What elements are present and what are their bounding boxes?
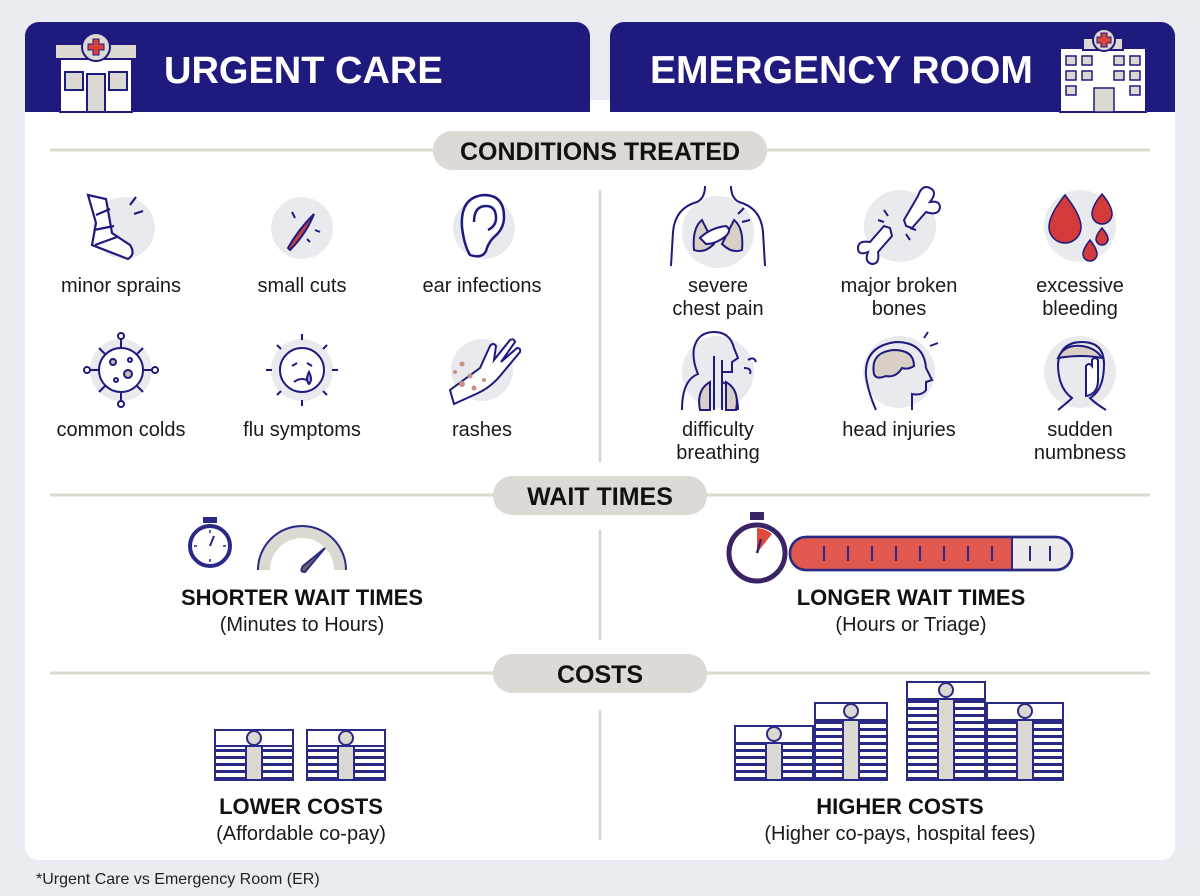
icon: stopwatch <box>729 512 785 581</box>
header: urgent care <box>25 22 590 112</box>
title: urgent care: URGENT CARE <box>164 50 443 92</box>
header: emergency room <box>610 22 1175 112</box>
panel: emergency room conditions: major broken <box>841 275 957 297</box>
panel: emergency room conditions: severe <box>688 275 748 297</box>
icon: chest pain <box>671 186 765 268</box>
panel: urgent care conditions: small cuts <box>258 275 346 297</box>
dividers <box>50 150 1150 840</box>
panel: er costs: (Higher co-pays, hospital fees) <box>764 823 1036 845</box>
section heading: wait times <box>493 476 707 515</box>
section heading: costs <box>493 654 707 693</box>
icon: small stopwatch <box>190 517 230 566</box>
icon: money stacks small <box>215 730 385 780</box>
icon: small cut <box>271 197 333 259</box>
panel: urgent care conditions: rashes <box>452 419 512 441</box>
panel: er wait: LONGER WAIT TIMES <box>797 585 1025 610</box>
panel: er costs: HIGHER COSTS <box>816 794 984 819</box>
panel: emergency room conditions: breathing <box>676 442 760 464</box>
icon: clinic building <box>55 33 137 112</box>
icon: head injury <box>863 332 938 410</box>
icon: money stacks large <box>735 682 1063 780</box>
panel: urgent care wait: (Minutes to Hours) <box>220 614 384 636</box>
icon: ear <box>453 195 515 259</box>
panel: urgent care conditions: flu symptoms <box>243 419 361 441</box>
icon: flu face <box>266 334 338 406</box>
footnote: *Urgent Care vs Emergency Room (ER) <box>36 871 320 888</box>
panel: emergency room conditions: sudden <box>1047 419 1113 441</box>
section heading: wait times: WAIT TIMES <box>527 483 673 511</box>
panel: er wait: (Hours or Triage) <box>835 614 987 636</box>
section heading: costs: COSTS <box>557 661 643 689</box>
panel: urgent care costs: (Affordable co-pay) <box>216 823 386 845</box>
panel: urgent care conditions: ear infections <box>423 275 541 297</box>
panel: urgent care conditions: common colds <box>57 419 185 441</box>
panel: urgent care wait: SHORTER WAIT TIMES <box>181 585 423 610</box>
panel: er wait <box>729 512 1072 636</box>
icon: breathing <box>682 332 756 410</box>
icon: gauge <box>258 526 346 572</box>
icon: numbness <box>1044 336 1116 410</box>
section heading: conditions treated <box>433 131 767 170</box>
progress bar <box>790 537 1072 570</box>
panel: urgent care conditions <box>57 195 541 441</box>
panel: urgent care costs: LOWER COSTS <box>219 794 383 819</box>
panel: emergency room conditions: head injuries <box>842 419 956 441</box>
icon: hospital <box>1060 29 1146 112</box>
title: emergency room: EMERGENCY ROOM <box>650 49 1033 92</box>
panel: emergency room conditions: difficulty <box>682 419 754 441</box>
panel: emergency room conditions: excessive <box>1036 275 1124 297</box>
panel: urgent care conditions: minor sprains <box>61 275 181 297</box>
icon: blood drops <box>1044 190 1116 262</box>
section heading: conditions treated: CONDITIONS TREATED <box>460 138 740 166</box>
icon: rash hand <box>450 339 520 404</box>
icon: sprain <box>88 195 155 259</box>
icon: virus <box>84 333 158 407</box>
panel: urgent care wait <box>181 517 423 636</box>
panel: emergency room conditions: numbness <box>1034 442 1126 464</box>
icon: broken bone <box>858 187 940 264</box>
panel: urgent care costs <box>215 730 386 845</box>
panel: er costs <box>735 682 1063 845</box>
panel: emergency room conditions: bones <box>872 298 926 320</box>
panel: emergency room conditions: bleeding <box>1042 298 1118 320</box>
panel: emergency room conditions: chest pain <box>672 298 764 320</box>
panel: emergency room conditions <box>671 186 1126 464</box>
